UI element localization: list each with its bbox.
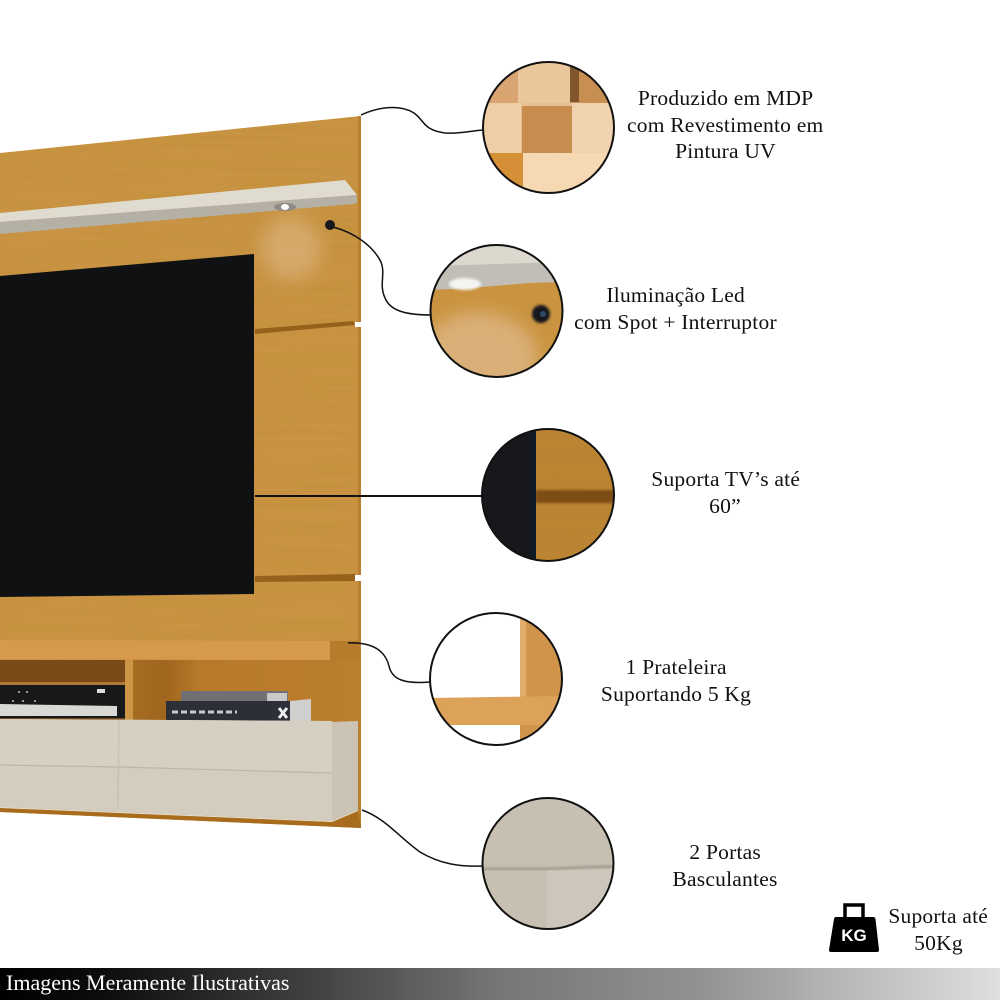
text: doors: 2 Portas: [689, 840, 761, 864]
wall panel with TV and furniture: [0, 110, 362, 830]
text: shelf: 1 Prateleira: [626, 655, 727, 679]
circle: LED spot and switch detail: [430, 244, 564, 378]
lower niche: [0, 660, 358, 722]
text: material: Pintura UV: [675, 139, 776, 163]
TV screen: [0, 254, 254, 597]
connector lines: [255, 107, 483, 866]
text: doors: Basculantes: [672, 867, 778, 891]
text: shelf: Suportando 5 Kg: [601, 682, 751, 706]
circle: shelf detail: [428, 611, 564, 747]
text: material: com Revestimento em: [627, 113, 823, 137]
receiver device: [0, 685, 125, 718]
LED glow on wood: [261, 216, 321, 280]
horizontal grooves: [255, 321, 362, 582]
circle: wood material detail: [480, 60, 620, 196]
footer bar: Imagens Meramente Ilustrativas: [6, 970, 289, 995]
cream cabinet with doors: [0, 719, 361, 828]
text: TV support: Suporta TV’s até: [651, 467, 800, 491]
text: TV support: 60”: [709, 494, 741, 518]
text: lighting: com Spot + Interruptor: [574, 310, 777, 334]
text: lighting: Iluminação Led: [606, 283, 745, 307]
text: weight capacity: Suporta até: [888, 904, 988, 928]
switch dot: [325, 220, 335, 230]
icon: weight: KG: [841, 926, 867, 945]
circle: TV edge detail: [480, 428, 616, 563]
stack of books: [166, 691, 311, 724]
upper cream shelf: [0, 180, 357, 234]
text: weight capacity: 50Kg: [914, 931, 963, 955]
wooden shelf: [0, 640, 360, 661]
text: material: Produzido em MDP: [638, 86, 813, 110]
icon: weight: [829, 905, 879, 952]
footer bar: [0, 968, 1000, 1000]
wood panel: [0, 110, 362, 830]
circle: cabinet door detail: [480, 796, 616, 932]
LED spot: [274, 203, 296, 211]
